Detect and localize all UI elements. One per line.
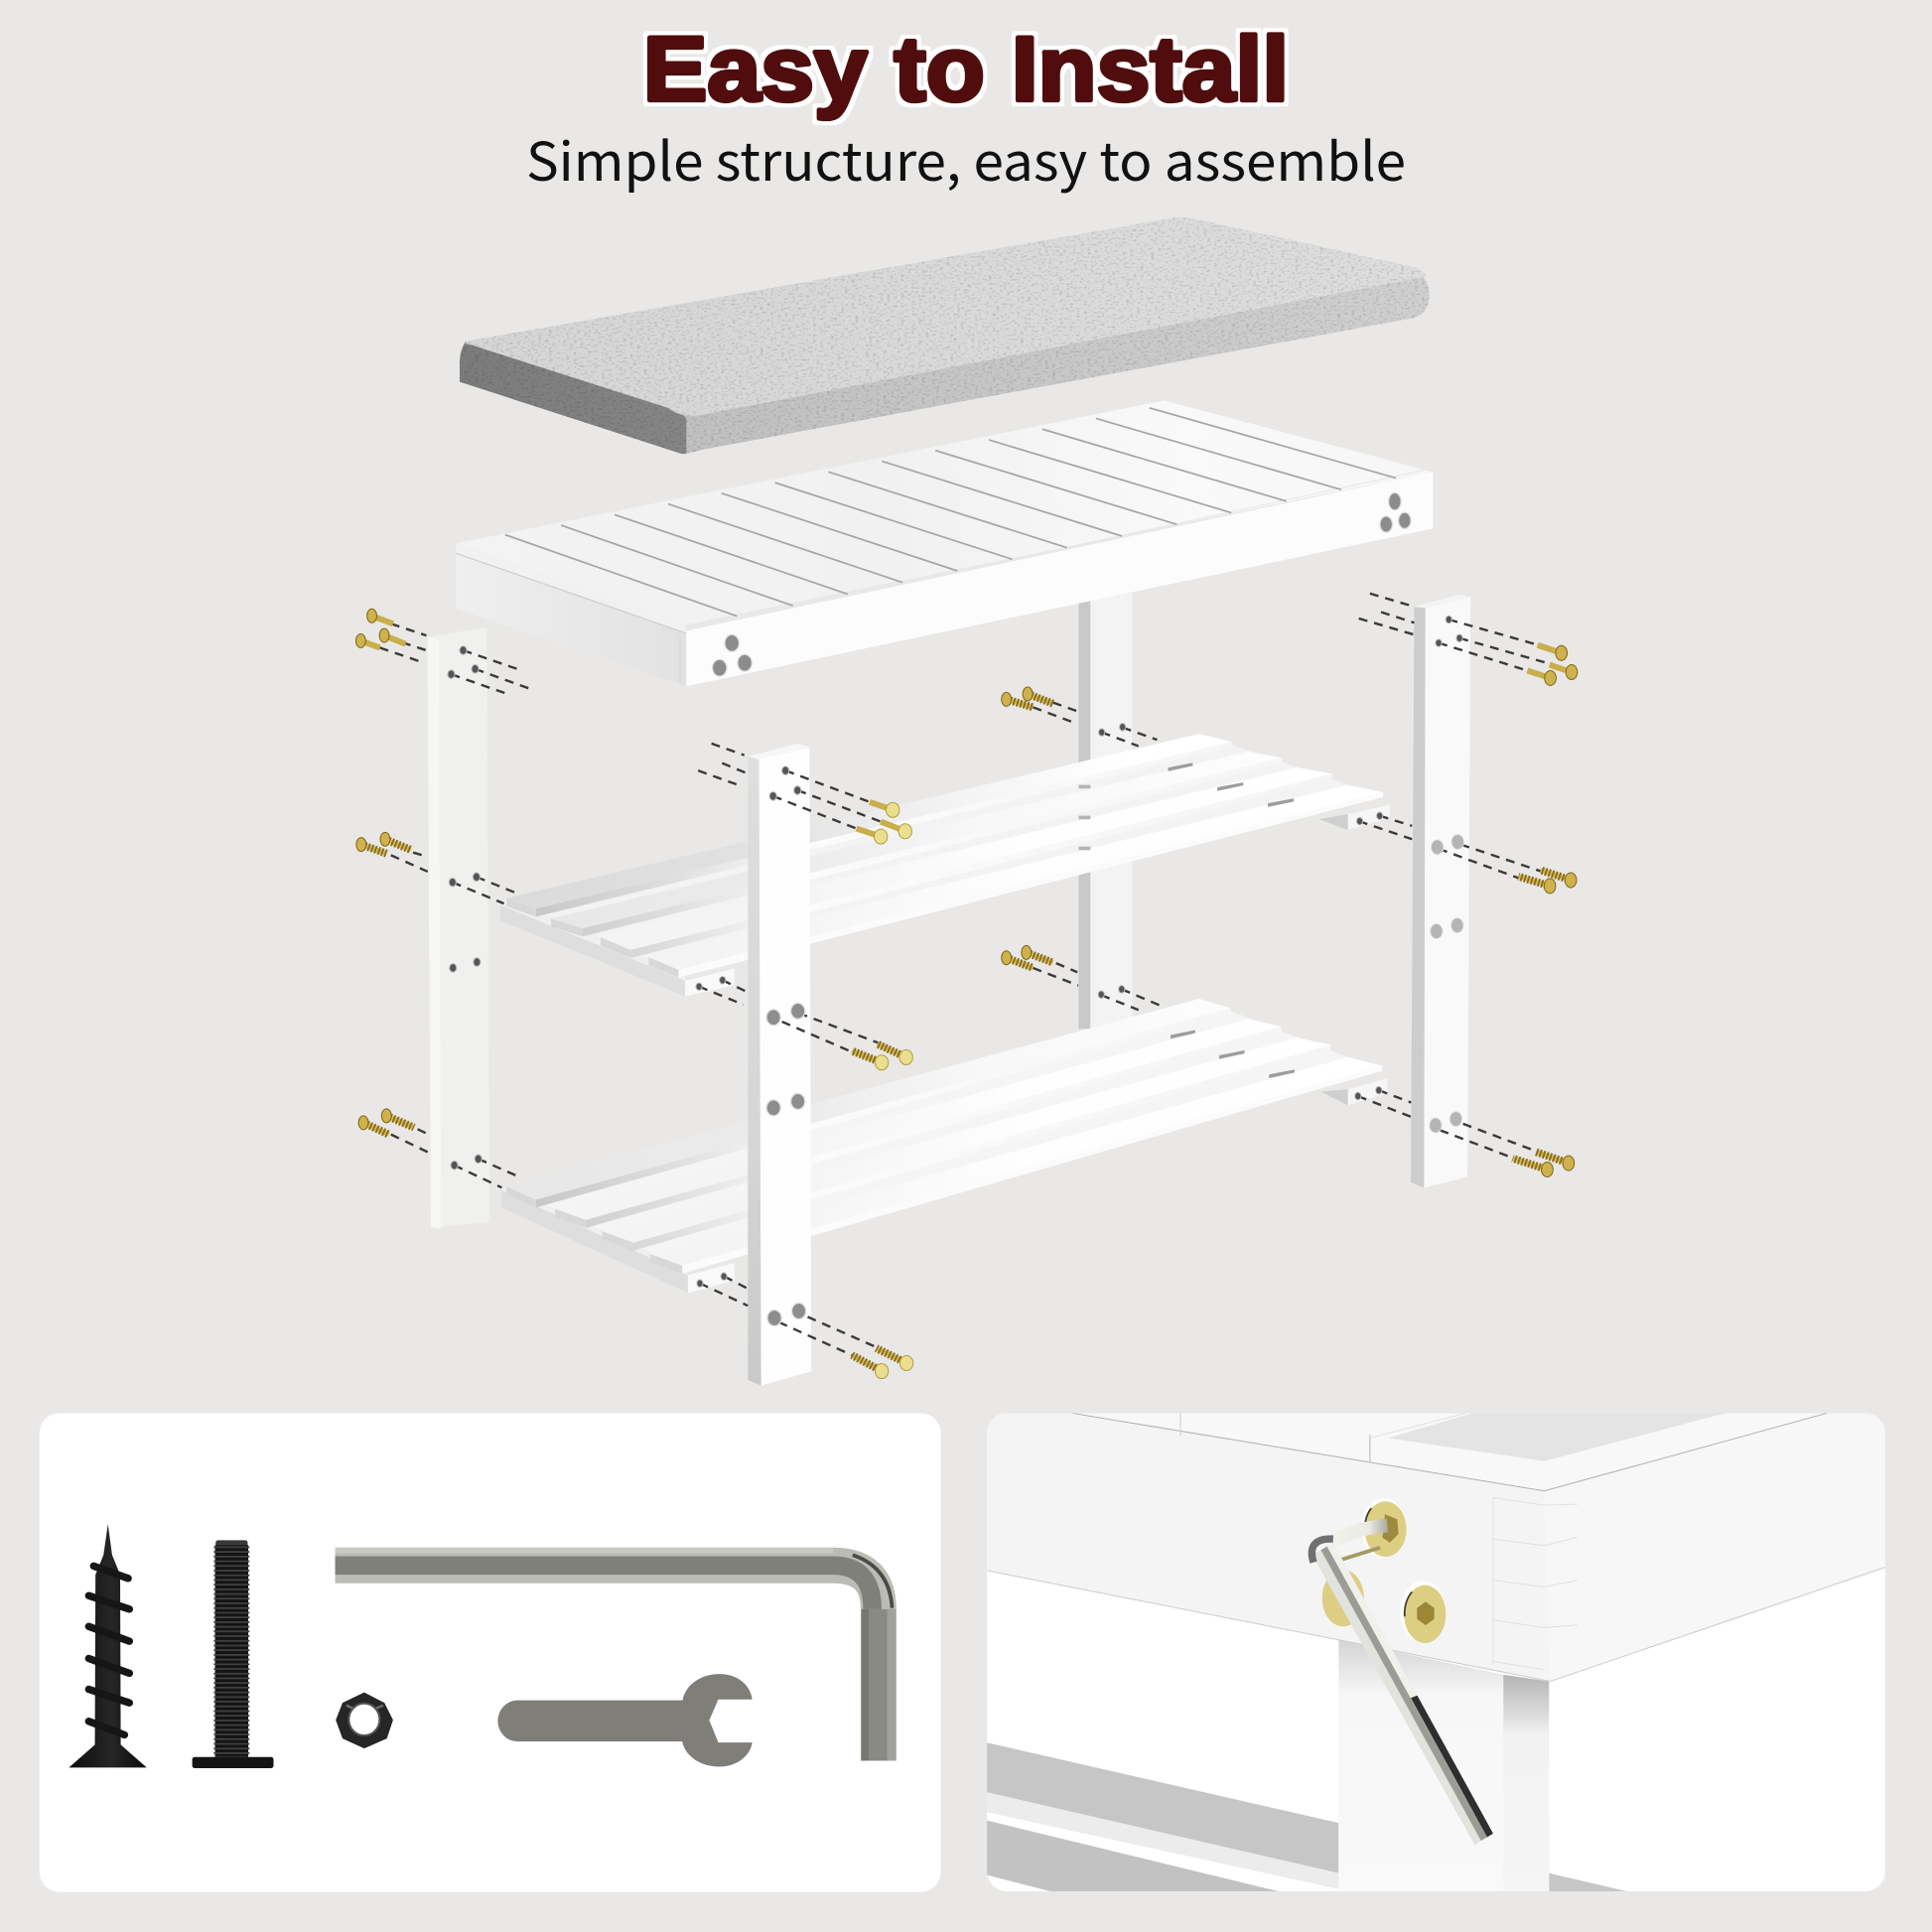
seat cushion [460, 217, 1430, 454]
back middle leg [1078, 592, 1133, 1029]
slat grooves [505, 408, 1396, 617]
panel: hardware kit [40, 1414, 941, 1892]
holes, right half [1098, 616, 1464, 1133]
holes, left half [448, 646, 806, 1326]
right leg [1411, 595, 1470, 1187]
left back leg [428, 627, 489, 1228]
board edges and finger joints [986, 1497, 1885, 1681]
brass screws, left half [355, 609, 913, 1379]
board holes [713, 492, 1411, 676]
board end face [1544, 1413, 1893, 1681]
board top surface [1072, 1413, 1827, 1491]
icon: hex nut [336, 1693, 393, 1748]
subtitle: Simple structure, easy to assemble [526, 120, 1406, 197]
panel: close-up of joint [986, 1413, 1893, 1893]
title: Easy to Install [643, 19, 1289, 120]
icon: hex key [336, 1551, 893, 1760]
upper shoe shelf [500, 734, 1390, 996]
leg close-up [1338, 1640, 1549, 1893]
brass bolts [1322, 1498, 1446, 1643]
hex key in bolt [1311, 1514, 1493, 1846]
dashed assembly guides, left half [380, 623, 881, 1355]
front leg [748, 744, 811, 1386]
dashed assembly guides, right half [1033, 594, 1550, 1159]
exploded bench diagram [355, 217, 1578, 1386]
hardware and guide lines, right half [1002, 594, 1578, 1176]
icon: wood screw [69, 1524, 147, 1767]
hardware and guide lines, left half [355, 609, 913, 1379]
brass screws, right half [1002, 645, 1578, 1176]
icon: black bolt [193, 1540, 274, 1768]
lower shoe shelf [501, 999, 1387, 1293]
board front face [986, 1413, 1550, 1681]
bench top board [456, 400, 1433, 686]
shelf seen behind leg [986, 1742, 1634, 1893]
icon: flat spanner [497, 1674, 753, 1766]
